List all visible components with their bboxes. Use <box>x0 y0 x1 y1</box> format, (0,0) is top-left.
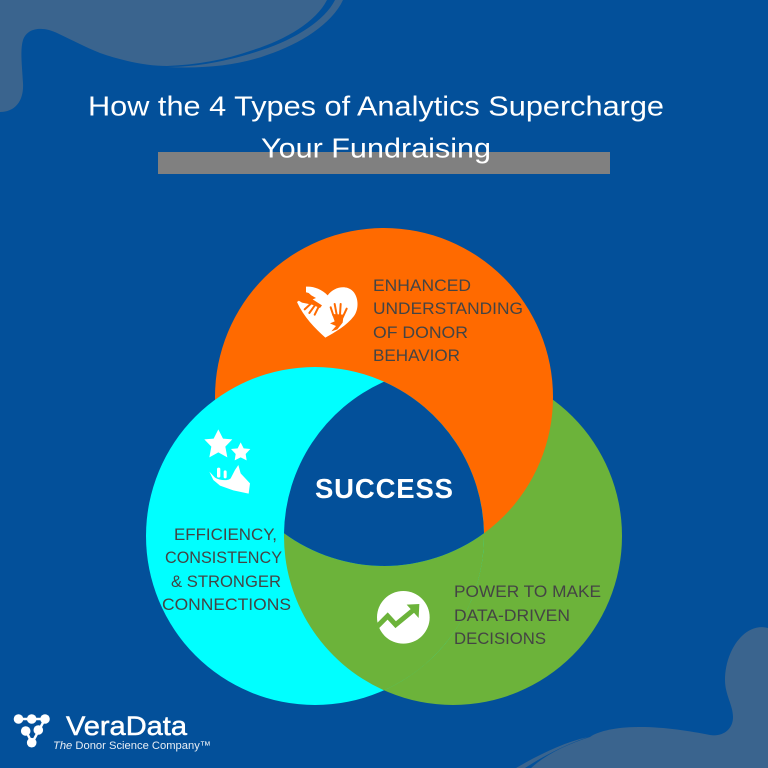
label: efficiency: CONNECTIONS <box>162 595 291 614</box>
label: data-driven decisions <box>454 582 601 648</box>
label: efficiency: CONSISTENCY <box>165 548 282 567</box>
circle: cyan <box>146 367 484 705</box>
center region <box>284 382 484 566</box>
label: efficiency: & STRONGER <box>171 572 281 591</box>
label: efficiency: EFFICIENCY, <box>174 525 277 544</box>
background blob: top left <box>0 0 343 112</box>
label: donor behavior <box>373 276 523 365</box>
circle: green <box>284 367 622 705</box>
label: data-driven decisions: DECISIONS <box>454 629 546 648</box>
label: efficiency <box>162 525 291 614</box>
label: donor behavior: UNDERSTANDING <box>373 299 523 318</box>
center label: success: SUCCESS <box>315 473 453 504</box>
circle: orange <box>215 228 553 566</box>
title text <box>88 90 664 164</box>
label: donor behavior: ENHANCED <box>373 276 471 295</box>
label: data-driven decisions: POWER TO MAKE <box>454 582 601 601</box>
logo tagline: The Donor Science Company™ <box>53 740 211 752</box>
label: donor behavior: OF DONOR <box>373 323 468 342</box>
icon: stars over hand <box>204 429 250 494</box>
logo wordmark: VeraData <box>66 711 188 741</box>
venn diagram <box>146 228 622 705</box>
background blob: bottom right <box>516 627 768 768</box>
icon: growth chart <box>376 591 430 644</box>
title <box>88 90 664 174</box>
green overlap over cyan <box>284 533 484 690</box>
title text: How the 4 Types of Analytics Supercharge <box>88 90 664 122</box>
title underline bar <box>158 152 610 174</box>
logo mark <box>14 714 50 748</box>
label: data-driven decisions: DATA-DRIVEN <box>454 606 570 625</box>
logo: VeraData <box>14 711 211 752</box>
icon: heart with hands <box>295 287 358 338</box>
title text: Your Fundraising <box>261 132 491 164</box>
right hand cutout <box>330 304 347 331</box>
left hand cutout <box>295 291 322 315</box>
label: donor behavior: BEHAVIOR <box>373 346 460 365</box>
